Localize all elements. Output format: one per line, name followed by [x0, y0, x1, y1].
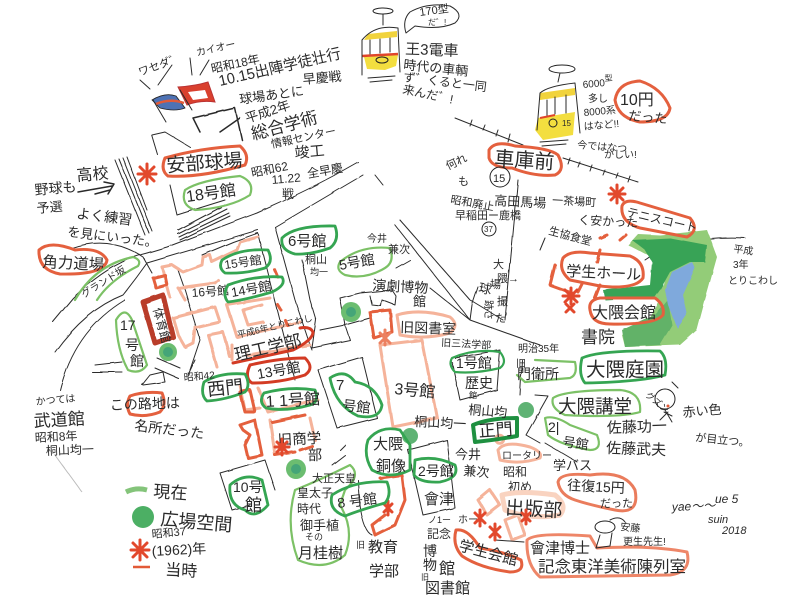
text: tram caption — [401, 41, 487, 107]
text: wartime game note: 10.15出陣学徒壮行 — [217, 45, 343, 90]
label: alley — [110, 392, 205, 442]
park watercolor: okuma garden — [603, 230, 717, 347]
label: building 10: 館 — [245, 496, 262, 515]
label: ground slope — [75, 257, 139, 301]
label: publishing dept: 出版部 — [505, 497, 563, 522]
label: aizu museum — [527, 535, 688, 577]
label: building 6: 均一 — [310, 266, 328, 277]
text: 1987 game: 11.22 — [271, 170, 302, 187]
speech bubble: 170 type — [405, 1, 459, 33]
figure with comment — [644, 382, 750, 450]
legend: plaza space: 広場空間 — [160, 509, 233, 535]
text: 1987 game: 戦 — [282, 187, 294, 201]
label: building 5: 兼次 — [388, 243, 410, 256]
label: laurel tree: その — [305, 532, 323, 542]
signature: yae～～ — [671, 498, 716, 514]
flag labels: カイオー — [195, 38, 237, 59]
text: co-op cafeteria: く安かった — [578, 213, 639, 230]
text: wartime game note: 早慶戦 — [302, 69, 342, 87]
speech bubble: 170 type: 170型 — [418, 1, 449, 19]
figure with comment: が目立つ。 — [695, 430, 750, 450]
label: rotary: 昭和 — [503, 465, 527, 479]
label: alley: 名所だった — [134, 417, 205, 442]
label: building 8: 8 号館 — [336, 490, 378, 511]
label: alley: この路地は — [110, 395, 180, 413]
text: stadium site note: 平成2年 — [243, 97, 292, 126]
label: tennis court: テニスコート — [625, 205, 699, 235]
label: building 15: 15号館 — [223, 253, 262, 272]
label: drama museum: 演劇博物 — [372, 277, 429, 296]
label: memorial museum: ノ1ー — [428, 515, 451, 525]
label: student union — [455, 530, 524, 572]
label: building 10: 10号 — [233, 479, 263, 495]
flag: keio — [178, 82, 215, 110]
tram track — [455, 118, 638, 182]
label: sumo dojo — [39, 245, 107, 274]
asterisk: okuma kaikan — [563, 288, 579, 312]
callout: bus fare: 学バス — [553, 458, 592, 473]
label: memorial museum: 館 — [439, 560, 455, 578]
figure: ando — [595, 518, 666, 548]
label: main gate: 正門 — [478, 420, 513, 441]
callout: bus fare — [553, 458, 636, 511]
label: west gate: 西門 — [206, 376, 244, 400]
callout: bus fare: 往復15円 — [567, 477, 625, 496]
label: aizu museum: 會津博士 — [530, 540, 590, 557]
label: building 13 — [247, 358, 310, 383]
text: okuma baseball: 大 — [493, 257, 504, 271]
label: okuma statue: 銅像 — [376, 458, 406, 475]
label: building 6: 6号館 — [288, 233, 326, 250]
note: demolished — [728, 243, 778, 287]
signature: 2018 — [721, 525, 747, 537]
text: tram route: 早稲田ー鹿橋 — [455, 208, 521, 222]
text: architects: 佐藤武夫 — [606, 440, 666, 459]
text: budokan history: 桐山均一 — [46, 442, 94, 458]
text: tram route: 一茶場町 — [552, 193, 597, 209]
text: okuma baseball: 隈→ — [497, 272, 519, 285]
label: old library: 旧図書室 — [400, 319, 456, 337]
text: high school baseball memory — [34, 164, 159, 250]
label: building 1 and history museum: 1号館 — [456, 355, 492, 371]
label: building 14: 14号館 — [230, 278, 272, 300]
label: building 17 — [116, 312, 147, 372]
tram: 15 line — [535, 65, 580, 146]
text: high school baseball memory: 高校 — [76, 164, 109, 185]
label: science and engineering: 平成6年とりこわし — [236, 312, 313, 340]
legend: 1962 state: 当時 — [165, 561, 198, 581]
flag labels: ワセダ゛ — [136, 51, 182, 79]
text: tram route: 昭和廃止 — [449, 193, 495, 214]
label: building 8 — [331, 482, 389, 516]
text: tram route — [444, 152, 597, 236]
label: laurel tree: 時代 — [297, 502, 321, 516]
stop label: shakomae: 車庫前 — [494, 147, 555, 174]
text: tram caption: 来んだ゛! — [401, 82, 455, 107]
label: west gate: 昭和42 — [183, 369, 216, 384]
text: budokan history: かつては — [35, 393, 76, 408]
label: building 14 — [225, 277, 283, 302]
text: high school baseball memory: 予選 — [36, 199, 63, 216]
note: demolished: 3年 — [733, 258, 749, 271]
text: tram caption: 王3電車 — [405, 41, 459, 60]
text: student hall — [562, 252, 643, 287]
label: okuma kaikan: 大隈会館 — [592, 304, 656, 322]
text: budokan history — [33, 393, 94, 458]
callout: 10 yen: だった — [628, 108, 668, 126]
text: tram fleet note — [577, 73, 637, 161]
label: abe stadium: 安部球場 — [166, 150, 243, 177]
text: tram fleet note: かしい! — [604, 149, 637, 161]
label: aizu museum: 記念東洋美術陳列室 — [538, 558, 686, 576]
legend: current buildings: 現在 — [153, 482, 188, 503]
text: tram route: も — [458, 175, 469, 188]
label: old gatehouse: 明治35年 — [518, 342, 559, 355]
text: okuma baseball: 跡さ — [482, 300, 495, 320]
text: stadium site note: 竣工 — [294, 142, 325, 162]
label: laurel tree — [291, 465, 356, 565]
text: architects — [606, 418, 667, 459]
note: demolished: 平成 — [733, 243, 754, 258]
plaza circles — [159, 302, 534, 479]
label: building 1 and history museum: 歴史 — [465, 375, 493, 391]
label: laurel tree: 皇太子 — [297, 485, 333, 500]
label: building 17: 館 — [130, 353, 144, 369]
flags — [136, 38, 237, 122]
label: building 21: 号館 — [562, 434, 589, 453]
flag labels — [136, 38, 237, 89]
text: okuma baseball — [477, 257, 519, 325]
legend: 1962 state — [131, 525, 207, 581]
text: high school baseball memory: を見にいった。 — [67, 224, 159, 250]
label: rotary: ロータリー — [502, 450, 552, 462]
label: building 2: 兼次 — [463, 463, 490, 480]
note: demolished: とりこわし — [728, 275, 778, 287]
label: building 6 — [282, 226, 337, 277]
label: building 7: 7 — [336, 377, 344, 394]
legend: 1962 state: (1962)年 — [151, 540, 207, 559]
label: memorial museum: 旧 — [421, 573, 429, 582]
label: ground slope: グランド坂 — [79, 263, 128, 301]
label: main gate: 桐山均 — [468, 402, 508, 420]
label: old gatehouse — [516, 342, 576, 382]
figure: ando: 安藤 — [620, 521, 641, 535]
asterisk: tennis court — [609, 185, 625, 203]
label: building 17: 17 — [120, 317, 136, 333]
label: old education faculty: 学部 — [369, 563, 399, 580]
label: building 10 — [230, 477, 268, 515]
label: building 21 — [545, 417, 599, 453]
callout: 10 yen: 10円 — [620, 92, 654, 109]
text: stadium site note: 情報センター — [270, 124, 337, 151]
label: old gatehouse: 門衛所 — [517, 366, 559, 382]
tram: 170 type — [362, 8, 400, 82]
text: tram fleet note: 型 — [604, 73, 613, 83]
label: drama museum: 館 — [413, 294, 426, 309]
label: laurel tree: 月桂樹 — [298, 545, 343, 562]
label: okuma garden — [581, 351, 666, 383]
text: shoin: 書院 — [581, 328, 615, 347]
label: west gate — [183, 369, 248, 401]
label: rotary: 初め — [508, 480, 532, 494]
label: science and engineering — [232, 312, 313, 365]
label: building 18 — [184, 176, 251, 210]
label: okuma garden: 大隈庭園 — [586, 359, 664, 381]
label: old library — [397, 312, 456, 337]
text: high school baseball memory: よく練習 — [76, 205, 133, 228]
roads and building outlines — [53, 108, 745, 540]
text: high school baseball memory: 野球も — [34, 178, 77, 198]
text: budokan history: 昭和8年 — [34, 429, 78, 445]
label: commerce dept: 旧商学 — [277, 430, 322, 449]
label: laurel tree: 大正天皇 — [312, 471, 356, 485]
text: 1987 game: 昭和62 — [250, 159, 290, 180]
label: commerce dept — [275, 430, 322, 463]
text: tram route: 何れ — [444, 152, 469, 173]
label: memorial museum: 図書館 — [425, 580, 470, 597]
text: architects: 佐藤功一 — [607, 418, 667, 437]
text: 1987 game — [250, 159, 344, 201]
label: building 18: 18号館 — [185, 181, 237, 206]
label: building 2: 會津 — [424, 491, 454, 508]
label: sumo dojo: 角力道場 — [42, 253, 105, 274]
label: old gatehouse: 旧 — [516, 358, 526, 370]
speech bubble: 170 type: だ゛! — [428, 18, 446, 27]
text: tram fleet note: 多し — [588, 92, 608, 105]
figure with comment: 赤い色 — [682, 402, 722, 420]
label: memorial museum: 物 — [423, 557, 437, 573]
label: memorial museum — [421, 514, 478, 597]
label: building 2 — [414, 447, 490, 508]
label: okuma auditorium: 大隈講堂 — [558, 396, 632, 417]
callout: bus fare: だった — [600, 497, 633, 510]
label: okuma kaikan — [590, 298, 663, 324]
asterisks: publishing area — [384, 501, 530, 540]
figure: ando: 更生先生! — [623, 535, 666, 548]
callout: 10 yen — [615, 81, 670, 126]
label: science and engineering: 理工学部 — [233, 331, 303, 365]
label: gymnasium: 体育館 — [150, 306, 174, 345]
signature: suin — [708, 514, 728, 526]
label: building 5: 今井 — [367, 232, 387, 245]
signature: ue 5 — [715, 492, 739, 506]
text: tram route: 15 — [493, 173, 505, 185]
text: tram fleet note: 8000系 — [583, 104, 616, 119]
text: tram caption: ず゛くると一同 — [403, 70, 487, 94]
label: okuma auditorium — [552, 390, 640, 417]
label: building 2: 2号館 — [418, 463, 454, 479]
label: memorial museum: ホー — [458, 514, 478, 526]
label: old education faculty: 教育 — [368, 539, 398, 556]
text: okuma baseball: 球 — [477, 280, 493, 297]
text: tram fleet note: 今ではなつ — [577, 138, 628, 155]
text: wartime game note: 昭和18年 — [210, 52, 261, 76]
asterisk: stadium — [138, 164, 156, 184]
legend — [126, 482, 233, 581]
label: building 17: 号 — [125, 337, 139, 353]
label: building 1 and history museum: 旧三法学部 — [441, 336, 491, 352]
text: stadium site note: 総合学術 — [249, 108, 320, 144]
label: student union: 学生会館 — [457, 537, 519, 569]
text: tram route: 高田馬場 — [494, 193, 547, 211]
label: commerce dept: 部 — [308, 447, 322, 463]
figure with comment: グズン — [644, 389, 671, 415]
label: building 21: 2| — [548, 419, 559, 435]
label: building 2: 今井 — [455, 447, 481, 462]
text: tram fleet note: はなど!! — [583, 118, 620, 133]
text: stadium site note — [238, 83, 337, 162]
text: okuma baseball: た — [495, 312, 506, 325]
label: building 16: 16号館 — [191, 283, 229, 300]
label: building 1 and history museum: 館 — [469, 390, 477, 400]
label: building 5 — [338, 232, 410, 276]
text: stadium site note: 球場あとに — [238, 83, 305, 107]
asterisk: old library — [380, 330, 390, 345]
label: drama museum — [372, 277, 429, 309]
label: laurel tree: 御手植 — [300, 518, 339, 533]
label: building 5: 5号館 — [338, 251, 376, 273]
text: 1987 game: 全早慶 — [306, 161, 344, 181]
label: okuma statue — [366, 429, 410, 475]
text: okuma baseball: 撮 — [497, 294, 508, 308]
label: building 15 — [221, 250, 270, 273]
label: rotary — [498, 444, 552, 494]
text: tram fleet note: 6000 — [582, 78, 605, 91]
label: building 13: 13号館 — [256, 359, 301, 382]
label: building 1 and history museum — [441, 336, 504, 400]
text: tram route: 37 — [484, 225, 493, 234]
label: memorial museum: 博 — [423, 543, 437, 559]
label: building 7: 号館 — [342, 397, 371, 416]
label: building 3: 3号館 — [394, 380, 436, 402]
tram: 15 line: 15 — [562, 119, 571, 128]
label: building 11: 1 1号館 — [265, 390, 320, 411]
legend: 1962 state: 昭和37 — [151, 525, 186, 541]
flag: waseda — [152, 95, 185, 122]
label: building 6: 桐山 — [305, 252, 327, 266]
label: main gate — [414, 402, 517, 442]
text: student hall: 学生ホール — [566, 263, 642, 284]
label: memorial museum: 記念 — [427, 527, 451, 541]
text: tram caption: 時代の車輌 — [403, 57, 469, 79]
text: co-op cafeteria: 生協食堂 — [547, 223, 593, 248]
label: building 7 — [330, 374, 382, 417]
text: co-op cafeteria — [540, 213, 639, 250]
label: old education faculty — [356, 539, 399, 580]
label: old education faculty: 旧 — [356, 540, 365, 550]
text: budokan history: 武道館 — [33, 409, 85, 431]
signature — [671, 492, 747, 537]
text: okuma baseball: 場 — [490, 278, 501, 291]
label: okuma statue: 大隈 — [373, 436, 403, 453]
label: main gate: 桐山均一 — [414, 414, 467, 432]
